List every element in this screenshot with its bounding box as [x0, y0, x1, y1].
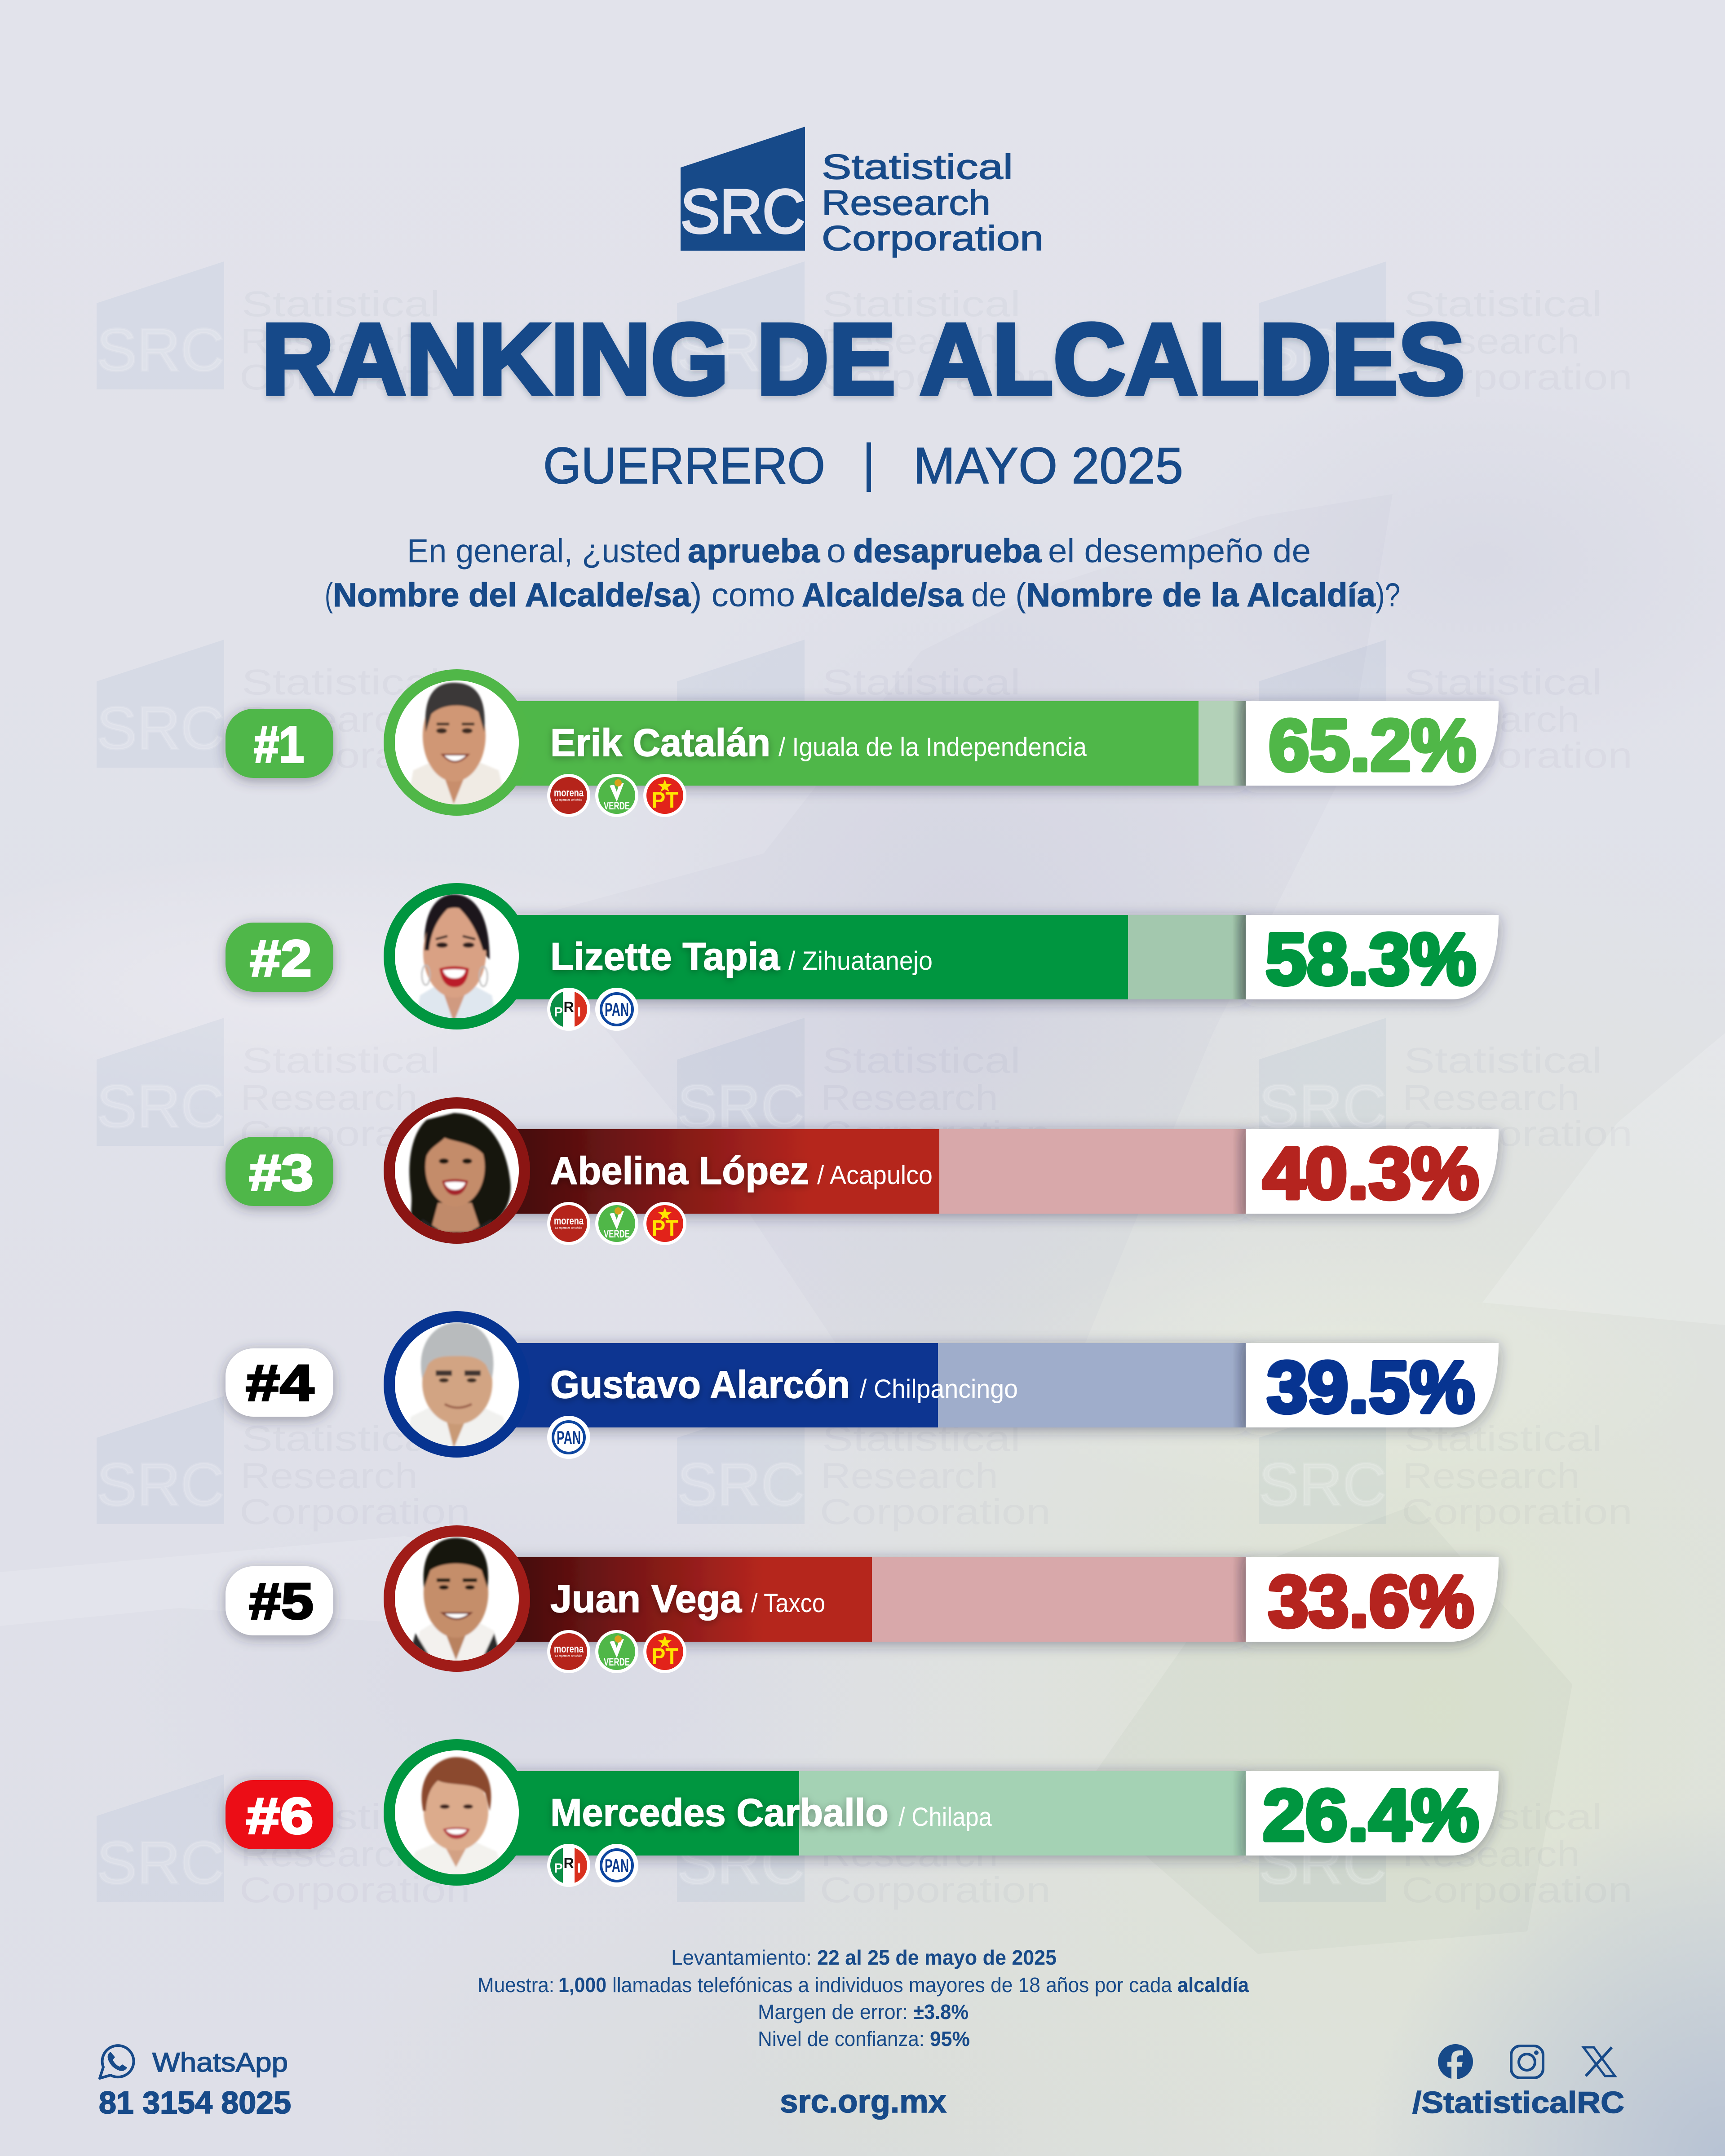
methodology notes: ±3.8%	[913, 2000, 969, 2023]
watermark logos grid: Statistical	[1404, 284, 1602, 324]
survey question: desaprueba	[853, 532, 1042, 570]
party logos: PRI, PAN: PAN	[605, 1855, 629, 1876]
party logos: Morena, Verde, PT: La esperanza de México	[555, 799, 582, 802]
portrait	[384, 1739, 530, 1886]
party logo: PAN: PAN	[557, 1427, 581, 1448]
portrait	[384, 1525, 530, 1672]
bar	[494, 1129, 1246, 1214]
party logos: PRI, PAN: PAN	[605, 999, 629, 1020]
party logos: PRI, PAN	[547, 1844, 638, 1887]
row 6: Mercedes Carballo	[0, 1717, 1725, 1910]
name and municipality: / Taxco	[751, 1589, 825, 1618]
bar	[494, 1771, 1246, 1856]
methodology notes: Margen de error:	[758, 2000, 908, 2023]
subtitle: Guerrero, mayo 2025	[543, 437, 1183, 495]
watermark logos grid: Corporation	[239, 735, 470, 775]
watermark logos grid: Statistical	[822, 1797, 1021, 1837]
watermark logos grid: Statistical	[822, 662, 1021, 702]
survey question: Nombre de la Alcaldía	[1026, 576, 1376, 614]
party logos: PRI, PAN: R	[563, 1855, 574, 1871]
watermark logos grid: Statistical	[1404, 1797, 1602, 1837]
logo: Statistical Research Corporation: Corporation	[822, 218, 1044, 258]
rank badge #2	[226, 923, 333, 992]
party logos: Morena, Verde, PT	[547, 1630, 686, 1673]
methodology notes: 1,000	[558, 1973, 606, 1997]
watermark logos grid: Statistical	[822, 1040, 1021, 1080]
watermark logos grid: Corporation	[239, 1113, 470, 1153]
name and municipality: Abelina López	[550, 1149, 809, 1193]
rank badge #5	[226, 1566, 333, 1635]
logo: Statistical Research Corporation	[681, 127, 1044, 258]
watermark logos grid: SRC	[1259, 1073, 1386, 1140]
party logos: PRI, PAN: I	[577, 1005, 581, 1020]
bar	[494, 915, 1246, 999]
watermark logos grid: SRC	[1259, 317, 1386, 384]
watermark logos grid: Research	[821, 699, 998, 739]
watermark logos grid: Corporation	[1402, 1492, 1632, 1532]
row 3: Abelina López	[0, 1075, 1725, 1268]
logo: Statistical Research Corporation: SRC	[681, 177, 805, 246]
contact: WhatsApp: 81 3154 8025	[99, 2085, 291, 2120]
rank badge #3	[226, 1137, 333, 1206]
watermark logos grid: Corporation	[820, 357, 1051, 397]
party logos: PRI, PAN	[547, 988, 638, 1031]
row 4: Gustavo Alarcón	[0, 1289, 1725, 1482]
watermark logos grid: Statistical	[242, 284, 440, 324]
survey question: ) como	[690, 576, 795, 614]
watermark logos grid: Research	[240, 321, 418, 361]
party logo: PAN	[547, 1416, 590, 1459]
watermark logos grid: Corporation	[1402, 1870, 1632, 1910]
website: src.org.mx	[780, 2084, 947, 2120]
survey question: )?	[1376, 576, 1400, 614]
survey question: En general, ¿usted	[407, 532, 681, 570]
name and municipality	[550, 721, 1087, 764]
row 2: Lizette Tapia	[217, 883, 1508, 1031]
watermark logos grid: SRC	[97, 1451, 224, 1518]
methodology notes: 22 al 25 de mayo de 2025	[817, 1946, 1057, 1969]
rank badge #4: #4	[246, 1355, 314, 1412]
survey question: o	[827, 532, 846, 570]
survey question: Nombre del Alcalde/sa	[333, 576, 691, 614]
watermark logos grid: Research	[1402, 699, 1580, 739]
icon: X	[1583, 2047, 1615, 2076]
watermark logos grid: SRC	[97, 695, 224, 762]
name and municipality: Juan Vega	[550, 1577, 742, 1621]
watermark logos grid: Research	[240, 1078, 418, 1118]
logo: Statistical Research Corporation: Statistical	[822, 147, 1013, 186]
watermark logos grid: Research	[240, 1834, 418, 1874]
watermark logos grid: Corporation	[820, 1870, 1051, 1910]
watermark logos grid: Research	[240, 1456, 418, 1496]
watermark logos grid: Statistical	[822, 1418, 1021, 1458]
header: logo, title, subtitle, question	[0, 112, 1725, 651]
name and municipality	[550, 1577, 825, 1621]
party logos: Morena, Verde, PT	[547, 774, 686, 817]
bar	[494, 701, 1246, 786]
name and municipality	[550, 1149, 933, 1193]
party logos: Morena, Verde, PT: La esperanza de México	[555, 1227, 582, 1230]
methodology notes: 95%	[930, 2027, 970, 2050]
name and municipality: / Zihuatanejo	[788, 946, 933, 976]
bar	[494, 1557, 1246, 1642]
methodology notes	[478, 1946, 1249, 2050]
name and municipality: / Chilapa	[898, 1803, 992, 1832]
party logos: PRI, PAN: P	[554, 1861, 563, 1876]
survey question: (	[325, 576, 333, 614]
name and municipality: / Iguala de la Independencia	[778, 733, 1087, 762]
watermark logos grid: Research	[240, 699, 418, 739]
name and municipality: Lizette Tapia	[550, 935, 780, 978]
watermark logos grid: SRC	[1259, 1451, 1386, 1518]
contact: WhatsApp	[99, 2046, 291, 2120]
bar	[494, 1343, 1246, 1427]
watermark logos grid: Corporation	[1402, 735, 1632, 775]
rank badge #1	[226, 709, 333, 778]
watermark logos grid: Corporation	[239, 357, 470, 397]
party logos: Morena, Verde, PT: La esperanza de México	[555, 1655, 582, 1658]
portrait	[384, 1097, 530, 1244]
methodology notes: Nivel de confianza:	[758, 2027, 924, 2050]
survey question: el desempeño de	[1048, 532, 1311, 570]
party logos: PRI, PAN: P	[554, 1005, 563, 1020]
watermark logos grid: Statistical	[1404, 662, 1602, 702]
party logos: Morena, Verde, PT: morena	[554, 787, 584, 799]
rank badge #5: #5	[249, 1573, 314, 1630]
social handle	[1412, 2044, 1624, 2120]
value box 39.5%: 39.5%	[1267, 1347, 1475, 1428]
row 1: Erik Catalán	[217, 669, 1508, 817]
value box 65.2%: 65.2%	[1269, 705, 1476, 786]
watermark logos grid: Corporation	[820, 1492, 1051, 1532]
party logos: Morena, Verde, PT: PT	[651, 1644, 678, 1669]
name and municipality: Mercedes Carballo	[550, 1791, 889, 1834]
watermark logos grid: Statistical	[1404, 1418, 1602, 1458]
logo: Statistical Research Corporation: Research	[822, 183, 991, 222]
watermark logos grid: Research	[821, 1456, 998, 1496]
name and municipality: Gustavo Alarcón	[550, 1363, 850, 1406]
rank badge #4	[226, 1348, 333, 1417]
watermark logos grid: Corporation	[239, 1870, 470, 1910]
footer: notes and contact	[0, 1931, 1725, 2156]
party logos: PRI, PAN: I	[577, 1861, 581, 1876]
watermark logos grid: Statistical	[242, 1040, 440, 1080]
name and municipality: / Acapulco	[817, 1161, 933, 1190]
value box 26.4%: 26.4%	[1263, 1775, 1479, 1856]
name and municipality: Erik Catalán	[550, 721, 770, 764]
rank badge #6	[226, 1780, 333, 1849]
watermark logos grid: Corporation	[820, 735, 1051, 775]
party logos: Morena, Verde, PT: VERDE	[604, 800, 630, 812]
survey question	[325, 532, 1400, 614]
watermark logos grid: SRC	[97, 1073, 224, 1140]
watermark logos grid: Corporation	[1402, 1113, 1632, 1153]
watermark logos grid: Research	[1402, 1834, 1580, 1874]
watermark logos grid: Research	[1402, 1456, 1580, 1496]
social handle: /StatisticalRC	[1412, 2085, 1624, 2120]
party logos: Morena, Verde, PT: morena	[554, 1215, 584, 1227]
rank badge #1: #1	[254, 716, 304, 773]
watermark logos grid: Research	[821, 321, 998, 361]
watermark logos grid: SRC	[677, 317, 805, 384]
watermark logos grid: Statistical	[1404, 1040, 1602, 1080]
methodology notes: Levantamiento:	[671, 1946, 812, 1969]
watermark logos grid: Corporation	[1402, 357, 1632, 397]
party logos: Morena, Verde, PT	[547, 1202, 686, 1245]
methodology notes: Muestra:	[478, 1973, 554, 1997]
row 5: Juan Vega	[0, 1503, 1725, 1696]
methodology notes: alcaldía	[1177, 1973, 1249, 1997]
watermark logos grid: Statistical	[242, 662, 440, 702]
watermark logos grid: Statistical	[242, 1418, 440, 1458]
subtitle: Guerrero, mayo 2025: MAYO 2025	[913, 437, 1183, 495]
portrait	[384, 883, 530, 1029]
watermark logos grid: SRC	[677, 1451, 805, 1518]
value box 40.3%: 40.3%	[1263, 1133, 1479, 1214]
watermark logos grid: SRC	[97, 1829, 224, 1896]
watermark logos grid: SRC	[677, 1829, 805, 1896]
watermark logos grid: Research	[1402, 1078, 1580, 1118]
survey question: aprueba	[688, 532, 820, 570]
watermark logos grid: Statistical	[242, 1797, 440, 1837]
party logos: Morena, Verde, PT: morena	[554, 1643, 584, 1655]
icon: WhatsApp	[100, 2046, 134, 2078]
value box 58.3%: 58.3%	[1265, 919, 1476, 1000]
party logos: Morena, Verde, PT: PT	[651, 787, 678, 813]
rank badge #2: #2	[250, 930, 312, 987]
party logos: PRI, PAN: R	[563, 999, 574, 1015]
watermark logos grid: Research	[1402, 321, 1580, 361]
value box 33.6%: 33.6%	[1268, 1561, 1474, 1642]
contact: WhatsApp: WhatsApp	[152, 2047, 288, 2077]
watermark logos grid: SRC	[97, 317, 224, 384]
subtitle: Guerrero, mayo 2025: GUERRERO	[543, 437, 825, 495]
icon: Facebook	[1438, 2044, 1473, 2079]
party logos: Morena, Verde, PT: PT	[651, 1215, 678, 1241]
name and municipality	[550, 1363, 1018, 1406]
title: RANKING DE ALCALDES	[261, 302, 1465, 415]
watermark logos grid: Statistical	[822, 284, 1021, 324]
party logos: Morena, Verde, PT: VERDE	[604, 1228, 630, 1240]
watermark logos grid: SRC	[1259, 695, 1386, 762]
watermark logos grid: SRC	[677, 1073, 805, 1140]
survey question: de (	[971, 576, 1026, 614]
watermark logos grid: Research	[821, 1834, 998, 1874]
watermark logos grid: SRC	[677, 695, 805, 762]
watermark logos grid: Corporation	[820, 1113, 1051, 1153]
icon: Instagram	[1511, 2046, 1543, 2078]
rank badge #6: #6	[246, 1788, 314, 1845]
portrait	[384, 669, 530, 816]
methodology notes: llamadas telefónicas a individuos mayores de 18 años por cada	[612, 1973, 1172, 1997]
name and municipality: / Chilpancingo	[860, 1374, 1018, 1404]
watermark logos grid: SRC	[1259, 1829, 1386, 1896]
watermark logos grid: Research	[821, 1078, 998, 1118]
watermark logos grid: Corporation	[239, 1492, 470, 1532]
portrait	[384, 1311, 530, 1458]
name and municipality	[550, 935, 933, 978]
party logos: Morena, Verde, PT: VERDE	[604, 1656, 630, 1668]
rank badge #3: #3	[249, 1144, 314, 1202]
survey question: Alcalde/sa	[802, 576, 964, 614]
